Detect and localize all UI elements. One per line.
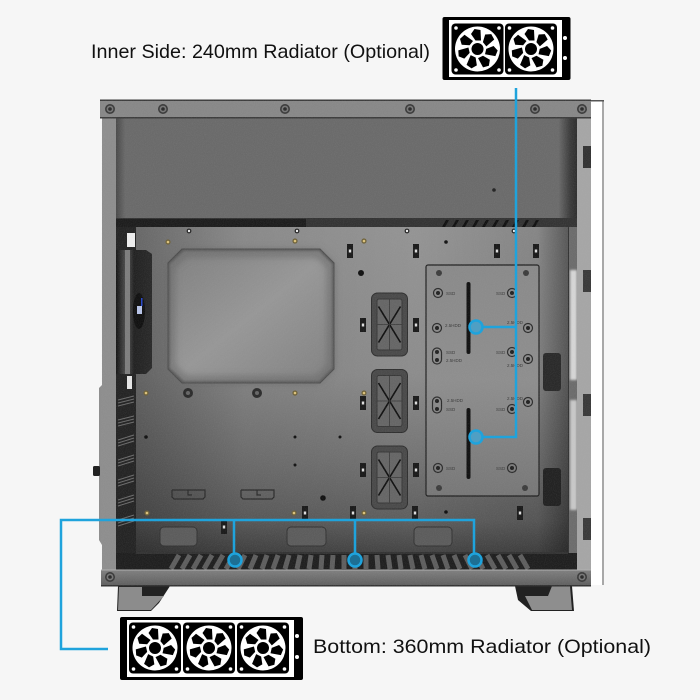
- plate labels: 2.5HDD: [507, 363, 524, 368]
- plate labels: 2.5HDD: [447, 398, 464, 403]
- bottom frame bar: [101, 570, 591, 586]
- SSD mounting plate: [426, 265, 539, 496]
- cable tie tabs: [221, 244, 539, 534]
- heading: inner side radiator: Inner Side: 240mm Radiator (Optional): [91, 41, 430, 63]
- lower panel cutouts: [160, 527, 452, 546]
- plate slots: [466, 282, 470, 479]
- side handle: [93, 385, 102, 545]
- top frame bar: [100, 100, 591, 118]
- callout: bottom connector: [61, 520, 482, 649]
- computer case: [93, 100, 604, 611]
- plate labels: 2.5HDD: [507, 396, 524, 401]
- plate labels: SSD: [446, 466, 456, 471]
- callout: inner side connector: [470, 88, 516, 444]
- floor with vent slats: [116, 552, 577, 571]
- icon: 240mm radiator: [442, 17, 570, 80]
- right inner wall: [568, 227, 577, 553]
- plate labels: [445, 291, 524, 471]
- feet: [117, 586, 574, 611]
- icon: 360mm radiator: [120, 617, 303, 680]
- plate labels: SSD: [446, 407, 456, 412]
- plate labels: SSD: [496, 350, 506, 355]
- back panel: [116, 227, 577, 553]
- glass side edge: [590, 100, 604, 585]
- plate labels: SSD: [496, 466, 506, 471]
- rear fan: [116, 250, 152, 374]
- left frame post: [102, 118, 116, 570]
- plate screws: [432, 270, 532, 491]
- plate labels: 2.5HDD: [507, 320, 524, 325]
- right side openings: [543, 353, 561, 506]
- plate labels: SSD: [496, 407, 506, 412]
- plate labels: 2.5HDD: [445, 323, 462, 328]
- top shroud panel: [116, 118, 577, 219]
- plate labels: SSD: [496, 291, 506, 296]
- left side expansion slots: [116, 227, 136, 553]
- motherboard cutout: [168, 249, 334, 383]
- panel shading: [136, 227, 568, 553]
- standoffs and holes: [143, 188, 516, 516]
- heading: bottom radiator: Bottom: 360mm Radiator (Optional): [313, 636, 651, 658]
- cable grommets: [372, 293, 408, 509]
- plate labels: SSD: [446, 291, 456, 296]
- right frame post: [577, 118, 591, 570]
- bracket hooks: [172, 490, 274, 499]
- metal grain: [101, 100, 591, 586]
- dark vent strip: [116, 218, 577, 228]
- plate labels: 2.5HDD: [446, 358, 463, 363]
- plate labels: SSD: [446, 350, 456, 355]
